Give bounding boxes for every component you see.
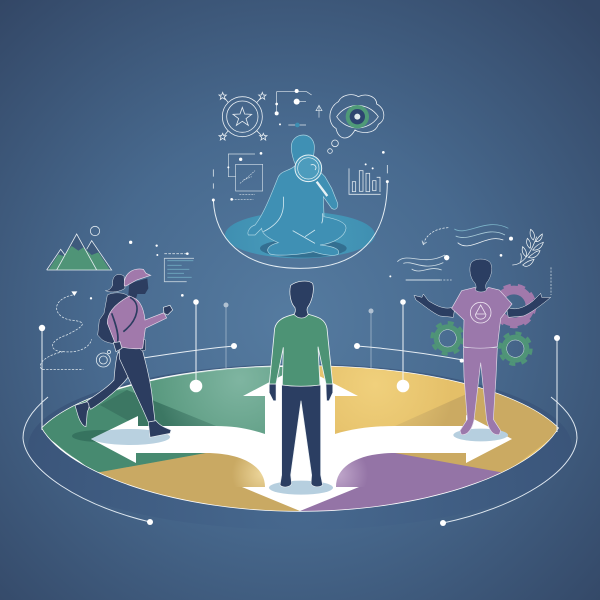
head (128, 278, 148, 299)
compass disc (41, 365, 559, 512)
curved dashed arrow (422, 228, 448, 245)
seat shadow (260, 239, 347, 258)
shoulder strap (112, 297, 137, 343)
left panel: running figure and journey icons (40, 226, 194, 437)
dashed vertical link (550, 267, 552, 295)
dashed trail (40, 295, 92, 369)
right marker post (397, 299, 409, 392)
front shoe (148, 421, 171, 437)
faint connector posts (224, 302, 374, 368)
back leg (86, 352, 128, 409)
seated figure (248, 135, 346, 255)
icon: network nodes (275, 89, 322, 127)
document icon (164, 252, 194, 282)
top panel: meditating observer (212, 89, 389, 268)
sparkle dots (389, 237, 513, 363)
head and neck (290, 281, 313, 318)
quadrant: top right yellow (319, 366, 558, 480)
mountains icon (47, 226, 112, 270)
sparkle dots (90, 241, 184, 299)
waves icon right (454, 225, 508, 246)
icon: scatter plot (227, 152, 263, 201)
left marker post (190, 299, 202, 392)
gear: purple (494, 286, 534, 326)
icon: thought cloud with eye (328, 95, 384, 153)
sweater (269, 314, 333, 386)
outer orbit ring lines (23, 397, 577, 526)
shadow (269, 481, 333, 495)
runner shadow on arrow (90, 429, 170, 445)
jacket (107, 296, 167, 349)
center figure (269, 281, 333, 495)
waves icon left (397, 255, 452, 280)
right post with dot (554, 335, 560, 432)
backpack (98, 293, 130, 344)
U-shaped frame (213, 182, 387, 268)
quadrant: right shadow (396, 388, 558, 473)
hip pouch (141, 339, 146, 351)
shirt (452, 287, 512, 348)
ponytail (105, 274, 125, 292)
connector arcs (143, 343, 463, 360)
hands (113, 305, 173, 352)
legs and feet (280, 385, 323, 487)
base platform under disc (28, 364, 572, 530)
magnifying glass (295, 155, 327, 196)
quadrant: left green shade (42, 390, 204, 472)
icon: compass star (219, 92, 267, 140)
hands (269, 384, 333, 401)
cap (124, 269, 151, 286)
ring icon (96, 350, 111, 367)
platform ellipse (225, 212, 375, 258)
runner ground shadow on green (72, 430, 108, 442)
legs (460, 348, 501, 435)
quadrant: lower left yellow (98, 453, 300, 511)
icon: bar chart (212, 151, 389, 201)
trail marker (71, 291, 77, 296)
laurel branch icon (512, 229, 543, 266)
white four-way arrows (91, 366, 512, 511)
right panel: open-armed figure with gears (389, 225, 551, 441)
front leg (119, 347, 155, 422)
highlights (160, 366, 280, 434)
shirt emblem (470, 302, 491, 323)
arms (414, 293, 551, 317)
gear: green right (500, 333, 531, 364)
shadow (453, 429, 508, 441)
back shoe (75, 402, 89, 427)
quadrant: lower right purple (300, 453, 502, 511)
gear: green left (432, 323, 463, 354)
left green dark wedge (100, 390, 216, 426)
neck and head (470, 259, 492, 292)
left post with dot (39, 325, 45, 430)
